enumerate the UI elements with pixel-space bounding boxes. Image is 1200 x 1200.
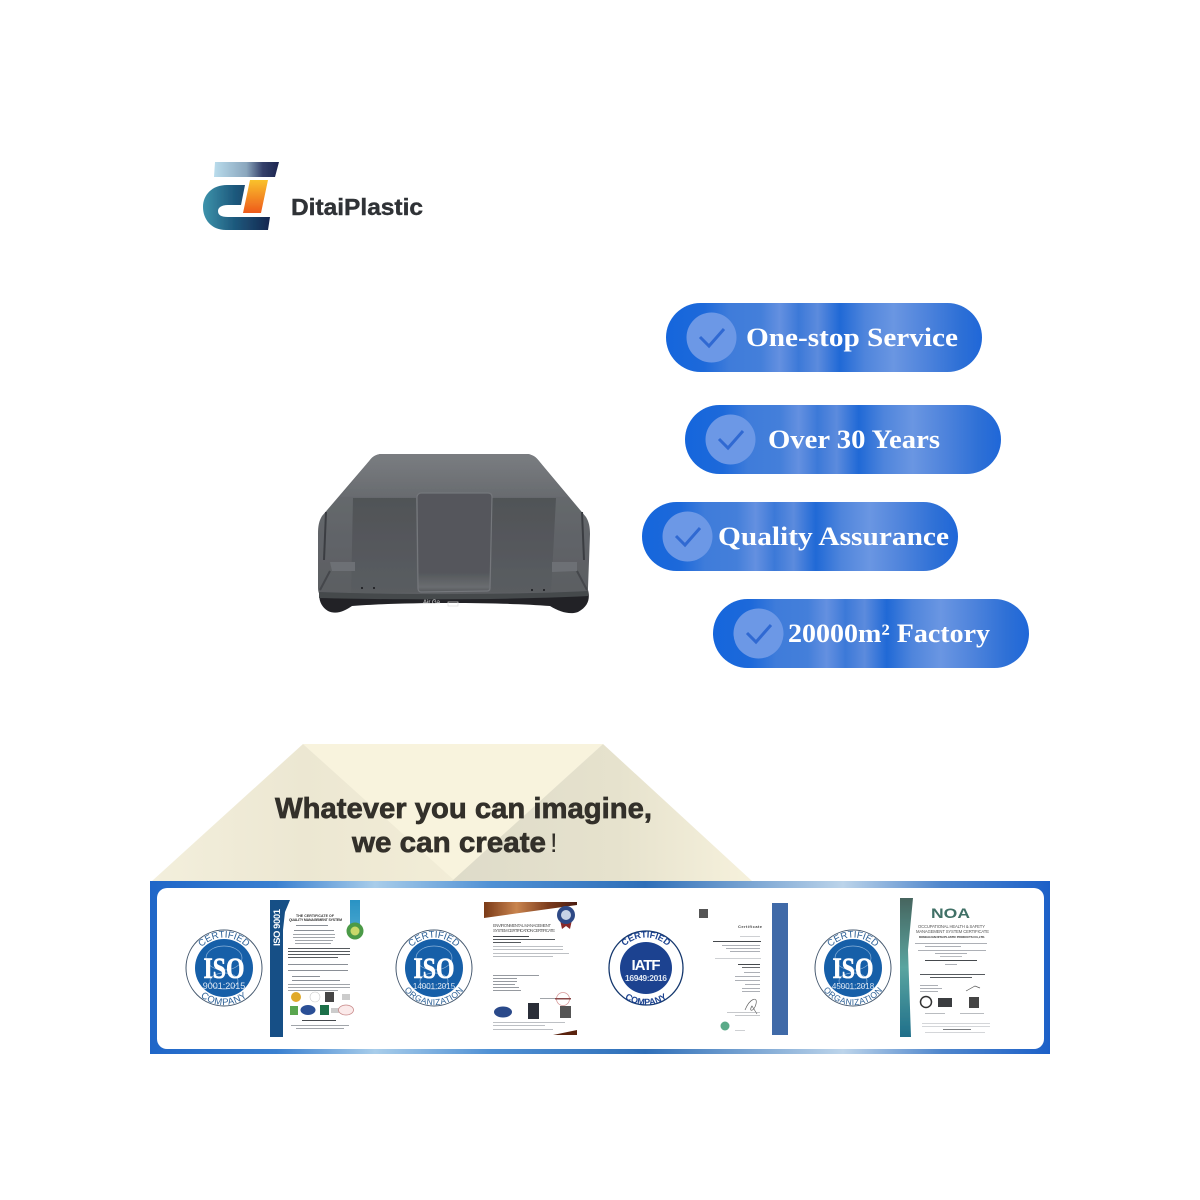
side panels: [351, 498, 417, 593]
badge: IATF 16949: 16949:2016: [625, 973, 667, 983]
badge: IATF 16949: COMPANY: [626, 993, 665, 1005]
logo: [203, 162, 423, 230]
slogan: we can create: [351, 827, 546, 859]
badge: ISO 14001: 14001:2015: [413, 982, 456, 991]
slogan: Whatever you can imagine,: [275, 793, 652, 825]
dark underside and feet: [319, 590, 589, 613]
pill: One-stop Service: [666, 303, 982, 372]
logo wordmark: DitaiPlastic: [291, 194, 423, 220]
label: Over 30 Years: [768, 425, 940, 454]
badge: ISO 9001: 9001:2015: [203, 981, 245, 991]
badge: ISO 45001: CERTIFIED: [828, 930, 878, 946]
certificate: environmental management: SYSTEM CERTIFICATION CERTIFICATE: [493, 928, 555, 933]
badge: IATF 16949: IATF: [632, 957, 660, 974]
badge: ISO 45001: 45001:2018: [832, 982, 875, 991]
badge: IATF 16949: [608, 930, 684, 1006]
label: One-stop Service: [746, 323, 958, 352]
badge: ISO 45001: ORGANIZATION: [824, 987, 882, 1006]
icon: check: [662, 512, 712, 562]
label: Quality Assurance: [718, 522, 949, 551]
badge: ISO 45001: ISO: [832, 952, 874, 985]
certificates panel: [150, 881, 1050, 1054]
certificate: IATF: Certificate: [738, 924, 763, 929]
mounting holes: [361, 587, 545, 591]
label: 20000m² Factory: [788, 619, 990, 648]
certificate: NOA occupational health and safety: [900, 898, 995, 1037]
badge: IATF 16949: CERTIFIED: [622, 931, 670, 945]
centre raised panel: [417, 493, 492, 592]
badge: ISO 9001: CERTIFIED: [198, 930, 250, 946]
slogan: [275, 793, 652, 859]
pyramid backdrop: [152, 744, 752, 881]
icon: logo mark: [203, 162, 279, 230]
badge: ISO 14001: CERTIFIED: [408, 930, 460, 946]
top face: [340, 454, 568, 497]
icon: check: [706, 414, 756, 464]
icon: check: [686, 312, 736, 362]
side grooves: [324, 512, 326, 560]
badge: ISO 14001: ISO: [414, 952, 454, 985]
certificate: ISO 9001 quality management: ISO 9001: [272, 908, 283, 946]
certificate: environmental management: [482, 902, 577, 1036]
badge: ISO 9001: COMPANY: [202, 992, 245, 1006]
certificate: NOA occupational health and safety: DONGGUAN DITAI PLASTIC PRODUCTS CO.,LTD.: [919, 935, 985, 939]
certificate: NOA occupational health and safety: NOA: [931, 905, 970, 921]
panel frame: [150, 881, 1050, 1054]
slogan: !: [550, 828, 558, 858]
body silhouette: [318, 454, 590, 598]
certificate: NOA occupational health and safety: OCCUPATIONAL HEALTH & SAFETY: [918, 924, 985, 929]
badge: ISO 9001: ISO: [204, 952, 244, 985]
certificate: ISO 9001 quality management: [270, 900, 364, 1037]
certificate: environmental management: ENVIRONMENTAL MANAGEMENT: [493, 923, 551, 928]
pill: Over 30 Years: [685, 405, 1001, 474]
pill: 20000 square metre Factory: [713, 599, 1029, 668]
certificate: NOA occupational health and safety: MANAGEMENT SYSTEM CERTIFICATE: [916, 929, 989, 934]
lip: [319, 591, 588, 599]
product photo: grey plastic cover: [318, 454, 590, 613]
badge: ISO 45001: [814, 930, 892, 1006]
certificate: ISO 9001 quality management: THE CERTIFICATE OF: [296, 914, 335, 918]
pill: Quality Assurance: [642, 502, 958, 571]
product marking: Air Ga: [423, 600, 441, 606]
badge: ISO 9001: [186, 930, 262, 1006]
badge: ISO 14001: [396, 930, 472, 1006]
certificate: ISO 9001 quality management: QUALITY MANAGEMENT SYSTEM: [289, 918, 342, 922]
icon: check: [734, 608, 784, 658]
certificate: IATF: [693, 900, 788, 1035]
badge: ISO 14001: ORGANIZATION: [405, 987, 464, 1006]
